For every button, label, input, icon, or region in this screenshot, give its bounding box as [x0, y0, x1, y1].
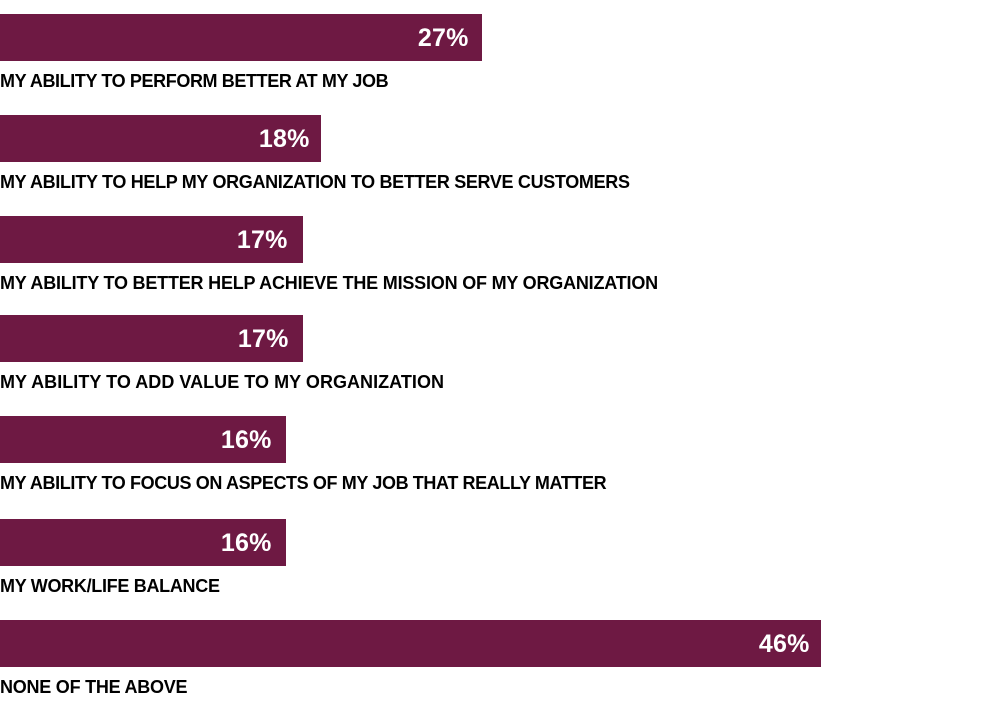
bar: 17% mission: 17%: [237, 226, 288, 254]
bar: 18%: 18%: [259, 125, 310, 153]
label: mission: MY ABILITY TO BETTER HELP ACHIEVE THE MISSION OF MY ORGANIZATION: [0, 273, 658, 293]
bar: 16% balance: 16%: [221, 529, 272, 557]
label: perform better: MY ABILITY TO PERFORM BETTER AT MY JOB: [0, 71, 388, 91]
bar: 16% focus: 16%: [221, 426, 272, 454]
bar: 17% value: 17%: [238, 325, 288, 353]
label: focus: MY ABILITY TO FOCUS ON ASPECTS OF MY JOB THAT REALLY MATTER: [0, 473, 606, 493]
label: none of the above: NONE OF THE ABOVE: [0, 677, 187, 697]
label: work/life balance: MY WORK/LIFE BALANCE: [0, 576, 220, 596]
bar: 16% focus: [0, 416, 286, 463]
bar: 27%: 27%: [418, 24, 468, 52]
label: add value: MY ABILITY TO ADD VALUE TO MY ORGANIZATION: [0, 372, 444, 392]
bar: 18%: [0, 115, 321, 162]
bar: 17% value: [0, 315, 303, 362]
bar: 27%: [0, 14, 482, 61]
bar: 46%: 46%: [759, 630, 810, 658]
label: serve customers: MY ABILITY TO HELP MY ORGANIZATION TO BETTER SERVE CUSTOMERS: [0, 172, 630, 192]
bar: 16% balance: [0, 519, 286, 566]
bar: 46%: [0, 620, 821, 667]
bar: 17% mission: [0, 216, 303, 263]
